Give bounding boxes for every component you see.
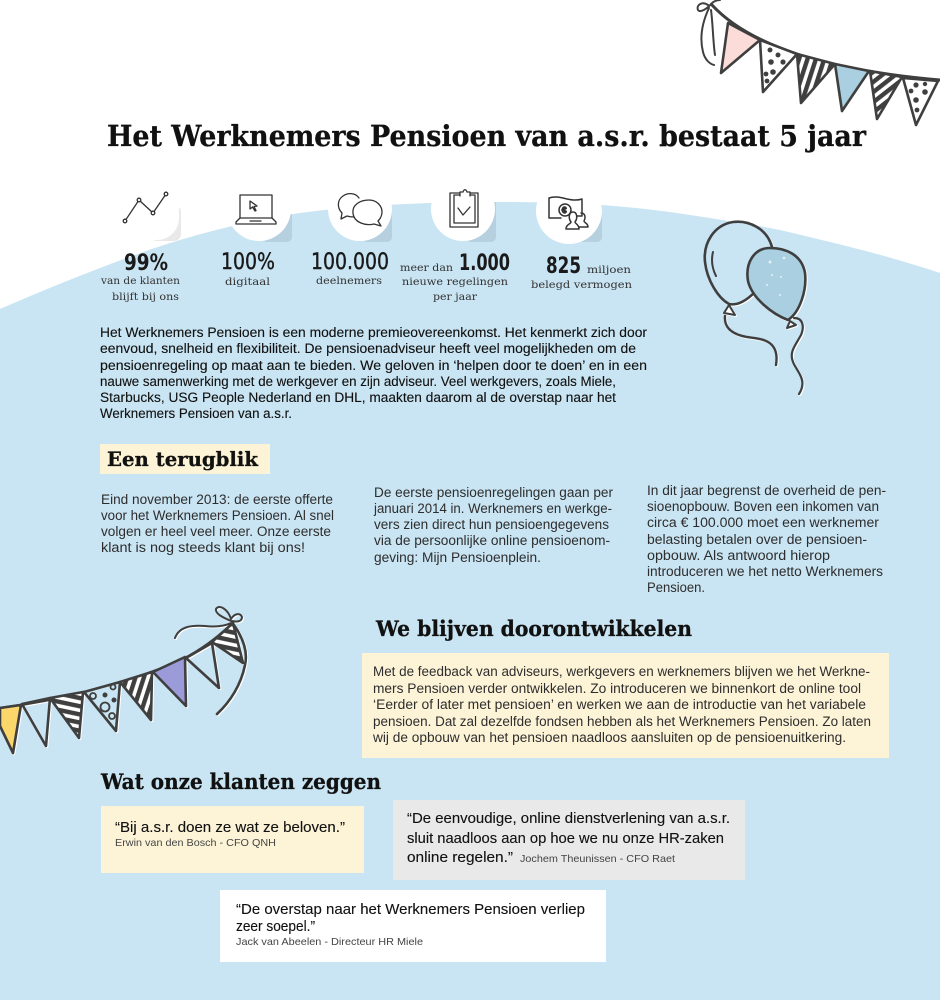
quote: Jack van Abeelen <box>220 890 606 962</box>
quote: Jochem Theunissen: Jochem Theunissen - CFO Raet <box>520 853 675 865</box>
quote: Jochem Theunissen: “De eenvoudige, online dienstverlening van a.s.r. <box>407 811 730 827</box>
heading: wat onze klanten zeggen: Wat onze klanten zeggen <box>100 769 381 794</box>
intro text: Starbucks, USG People Nederland en DHL, maakten daarom al de overstap naar het <box>100 390 616 405</box>
stat: 99% klanten: blijft bij ons <box>112 291 179 303</box>
flag: stripes left 1 <box>50 692 83 738</box>
flag: dots <box>760 40 797 92</box>
panel: doorontwikkelen: pensioen. Dat zal dezelfde fondsen hebben als het Werknemers Pensioen. Zo laten <box>373 714 871 729</box>
heading: een terugblik: Een terugblik <box>107 447 259 471</box>
heading: we blijven doorontwikkelen: We blijven doorontwikkelen <box>375 616 692 641</box>
intro text: nauwe samenwerking met de werkgever en zijn adviseur. Veel werkgevers, zoals Miele, <box>100 374 616 389</box>
icon: speech bubbles <box>338 194 382 226</box>
flag: pink <box>721 23 760 73</box>
title: Het Werknemers Pensioen van a.s.r. bestaat 5 jaar <box>107 119 867 153</box>
column: 2014: vers zien direct hun pensioengegevens <box>374 517 609 532</box>
stat: 825 miljoen: belegd vermogen <box>531 279 632 291</box>
quote: Jack van Abeelen: zeer soepel.” <box>236 919 315 935</box>
flag: purple <box>153 657 186 706</box>
intro text: eenvoud, snelheid en flexibiliteit. De pensioenadviseur heeft veel mogelijkheden om de <box>100 341 636 356</box>
panel: doorontwikkelen: wij de opbouw van het pensioen naadloos aansluiten op de pensioenuitkering. <box>372 730 846 745</box>
quote: Erwin van den Bosch: “Bij a.s.r. doen ze wat ze beloven.” <box>115 820 345 836</box>
stat: 100% digitaal: 100% <box>221 250 275 275</box>
column: 2013: voor het Werknemers Pensioen. Al snel <box>101 508 334 523</box>
column: 2013 <box>101 492 334 555</box>
flag: stripes left 3 <box>212 623 243 663</box>
stat: meer dan 1.000 regelingen: meer dan <box>400 262 453 274</box>
column: 2014: via de persoonlijke online pensioenom- <box>374 533 610 548</box>
column: overheid: introduceren we het netto Werknemers <box>647 564 883 579</box>
column: overheid <box>647 483 886 595</box>
flag: stripes 2 <box>870 71 902 119</box>
column: 2014: geving: Mijn Pensioenplein. <box>374 550 541 565</box>
stat: meer dan 1.000 regelingen: per jaar <box>433 291 478 303</box>
column: 2013: volgen er heel veel meer. Onze eerste <box>101 524 331 539</box>
quote: Erwin van den Bosch <box>101 806 364 873</box>
panel: doorontwikkelen <box>362 653 889 758</box>
column: overheid: circa € 100.000 moet een werknemer <box>647 515 880 530</box>
column: overheid: sioenopbouw. Boven een inkomen van <box>647 499 879 514</box>
flag: dots <box>84 682 120 731</box>
column: 2014 <box>373 485 614 565</box>
stat: 100.000 deelnemers <box>312 193 392 284</box>
flag: dots 2 <box>903 78 938 125</box>
intro text: pensioenregeling op maat aan te bieden. We geloven in ‘helpen door te doen’ en in een <box>100 358 647 373</box>
flag: blank 1 <box>22 698 50 746</box>
stat: 100.000 deelnemers: deelnemers <box>316 275 382 287</box>
quote: Jack van Abeelen: “De overstap naar het Werknemers Pensioen verliep <box>236 902 585 918</box>
column: overheid: In dit jaar begrenst de overheid de pen- <box>647 483 886 498</box>
quote: Jochem Theunissen: sluit naadloos aan op hoe we nu onze HR-zaken <box>407 831 724 847</box>
stat: meer dan 1.000 regelingen: 1.000 <box>459 251 510 276</box>
quote: Jochem Theunissen <box>393 800 745 880</box>
flag: blank 2 <box>186 643 219 688</box>
stat: 825 miljoen: miljoen <box>587 264 631 276</box>
stat: 825 miljoen: 825 <box>546 254 581 279</box>
quote: Jack van Abeelen: Jack van Abeelen - Directeur HR Miele <box>236 936 423 948</box>
stat: 99% klanten: van de klanten <box>100 275 180 287</box>
icon: clipboard <box>450 190 478 227</box>
intro text: Het Werknemers Pensioen is een moderne premieovereenkomst. Het kenmerkt zich door <box>100 325 648 340</box>
quote: Erwin van den Bosch: Erwin van den Bosch - CFO QNH <box>115 837 276 849</box>
flag: stripes <box>797 54 835 103</box>
bunting: top right <box>698 0 940 125</box>
stat: 100.000 deelnemers: 100.000 <box>311 250 389 275</box>
panel: doorontwikkelen: mers Pensioen verder ontwikkelen. Zo introduceren we binnenkort de online tool <box>373 681 861 696</box>
stat: 99% klanten <box>100 176 181 303</box>
icon: banknote and people: € <box>562 206 567 215</box>
bunting: left <box>0 607 246 753</box>
stat: 100% digitaal: digitaal <box>225 276 271 288</box>
column: 2013: Eind november 2013: de eerste offerte <box>101 492 333 507</box>
intro text: Werknemers Pensioen van a.s.r. <box>100 406 292 421</box>
stat: 100% digitaal <box>222 194 292 287</box>
intro text <box>100 325 648 421</box>
icon: line chart <box>123 192 168 223</box>
bow and tail <box>175 607 246 714</box>
column: 2013: klant is nog steeds klant bij ons! <box>101 540 305 555</box>
column: overheid: belasting betalen over de pensioen- <box>647 532 867 547</box>
quote: Jochem Theunissen: online regelen.” <box>407 850 513 866</box>
blue curved background <box>0 202 940 1000</box>
column: overheid: Pensioen. <box>647 580 705 595</box>
panel: doorontwikkelen: ‘Eerder of later met pensioen’ en werken we aan de introductie van het variabele <box>373 697 866 712</box>
icon: laptop <box>236 195 276 224</box>
column: 2014: januari 2014 in. Werknemers en werkge- <box>373 501 612 516</box>
flag: blue <box>835 64 869 111</box>
flag: stripes left 2 <box>120 672 152 720</box>
stat: meer dan 1.000 regelingen: nieuwe regelingen <box>402 276 508 288</box>
stat: 825 miljoen <box>531 196 632 290</box>
balloons <box>705 222 805 394</box>
stat: meer dan 1.000 regelingen <box>400 189 510 302</box>
column: overheid: opbouw. Als antwoord hierop <box>647 548 830 563</box>
panel: doorontwikkelen: Met de feedback van adviseurs, werkgevers en werknemers blijven we het Werkne- <box>373 664 870 679</box>
column: 2014: De eerste pensioenregelingen gaan per <box>374 485 614 500</box>
stat: 99% klanten: 99% <box>124 251 168 276</box>
flag: yellow <box>0 705 21 753</box>
